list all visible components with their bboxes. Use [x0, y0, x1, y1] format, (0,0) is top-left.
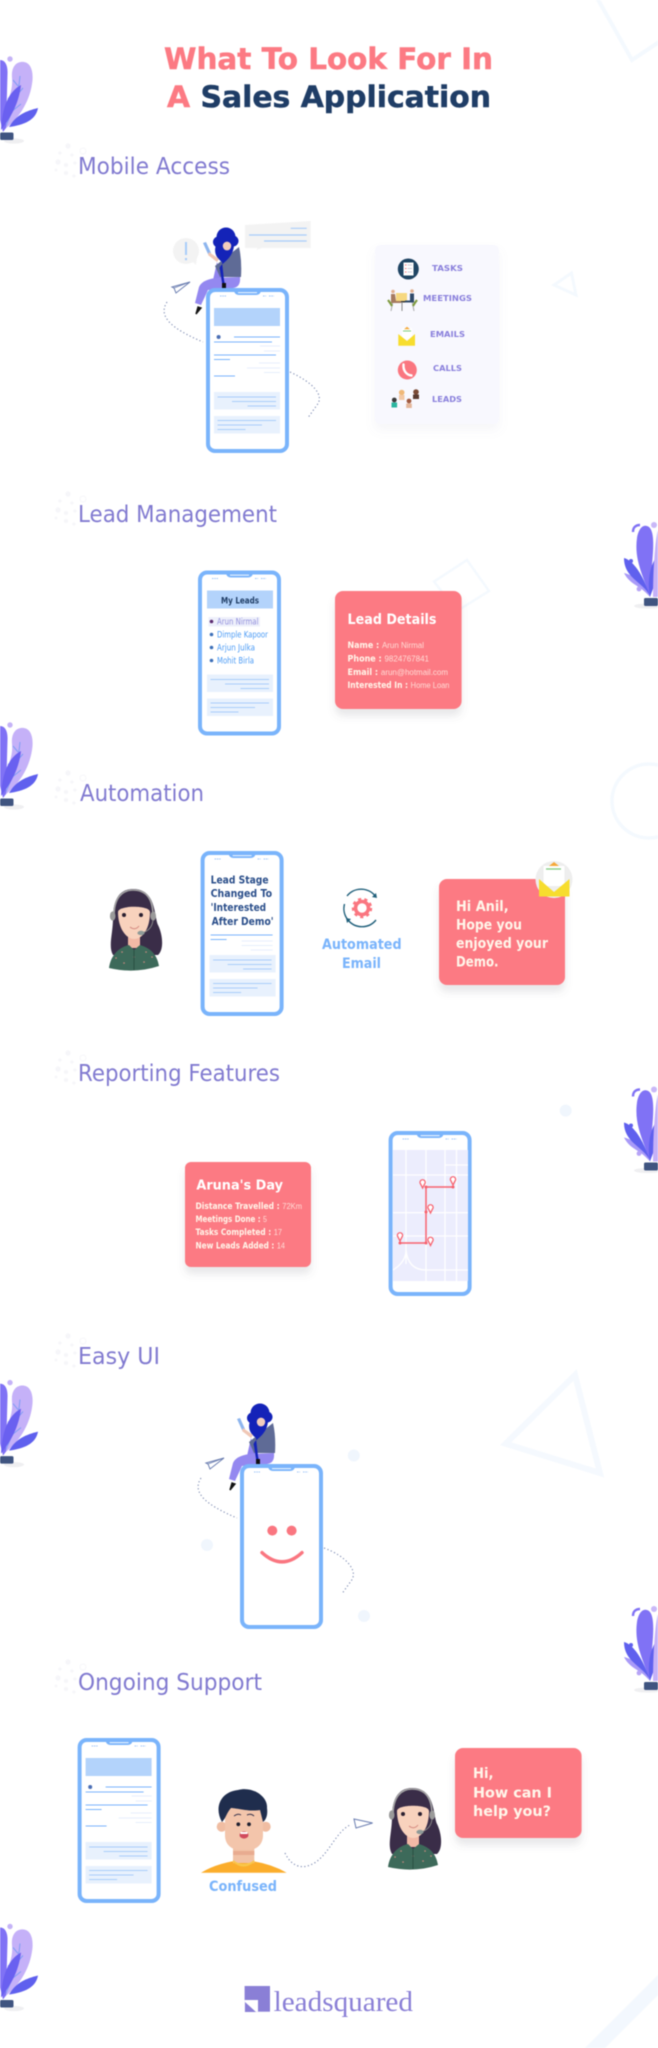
list of leads: Dimple Kapoor [217, 630, 268, 640]
card details: Name : Arun Nirmal [348, 640, 424, 651]
woman [164, 228, 241, 342]
heading: My Leads: My Leads [221, 596, 259, 606]
card: support message [455, 1748, 582, 1838]
day statistics [196, 1201, 302, 1250]
heading: Automation [55, 770, 204, 807]
card heading: Aruna's Day [196, 1178, 283, 1194]
phone: lead stage [203, 853, 282, 1014]
illustration: woman on smiley phone [198, 1404, 353, 1627]
heading: Ongoing Support: Ongoing Support [78, 1670, 262, 1696]
label: confused: Confused [209, 1879, 277, 1895]
route [400, 1187, 453, 1243]
day statistics: Tasks Completed : 17 [196, 1227, 282, 1237]
phone message: Changed To [211, 887, 272, 900]
icon: tasks [398, 258, 419, 280]
heading: Lead Management: Lead Management [78, 502, 277, 528]
title [164, 42, 493, 114]
label: calls: CALLS [433, 364, 462, 373]
agent avatar [388, 1788, 441, 1870]
phone message: 'Interested [211, 901, 266, 914]
phone message: After Demo' [212, 915, 274, 928]
icon: leads [392, 389, 419, 408]
label: emails: EMAILS [430, 330, 465, 339]
list of leads [217, 618, 268, 666]
list of leads: Arun Nirmal [217, 618, 258, 628]
heading: Easy UI [55, 1333, 160, 1370]
card: automated message: Hi Anil, [456, 899, 509, 915]
phone message [211, 874, 274, 928]
plant: top left [0, 56, 38, 144]
plant: left, easy UI section [0, 1380, 38, 1467]
heading: Lead Management [55, 491, 277, 528]
agent avatar [109, 889, 162, 971]
icon: meetings [388, 289, 417, 311]
background shapes [201, 0, 658, 2048]
card heading: Lead Details [348, 612, 436, 628]
smiley face [262, 1526, 302, 1562]
label: automated email: Automated [322, 937, 402, 953]
plant: right, lead section [624, 522, 658, 609]
heading: Mobile Access: Mobile Access [78, 154, 230, 180]
label: automated email: Email [342, 956, 381, 972]
heading: Ongoing Support [55, 1659, 262, 1696]
label: automated email [322, 937, 402, 972]
dotted trail [290, 372, 319, 417]
card: Aruna's day [185, 1162, 311, 1267]
heading: Automation: Automation [80, 781, 204, 807]
plant: left, automation section [0, 722, 38, 810]
confused man [201, 1789, 287, 1873]
phone: support app [80, 1740, 159, 1901]
map pins [397, 1177, 456, 1246]
card details: Email : arun@hotmail.com [348, 667, 448, 678]
card: support message: How can I [473, 1786, 552, 1802]
icon: envelope [536, 861, 572, 898]
heading: Reporting Features: Reporting Features [78, 1061, 280, 1087]
day statistics: Distance Travelled : 72Km [196, 1201, 302, 1211]
phone: my leads [200, 572, 279, 734]
plant: right, support section [624, 1606, 658, 1693]
icon: emails [398, 327, 415, 346]
card details: Interested In : Home Loan [348, 680, 450, 691]
card details: Phone : 9824767841 [348, 654, 429, 664]
heading: Mobile Access [55, 143, 230, 180]
label: leads: LEADS [432, 395, 462, 404]
heading: Easy UI: Easy UI [78, 1344, 160, 1370]
label: tasks: TASKS [432, 264, 463, 273]
card: automated message: enjoyed your [456, 936, 549, 952]
card: lead details [335, 591, 462, 709]
card details [348, 640, 450, 691]
speech bubble [245, 221, 311, 250]
icon: automation gear [344, 889, 377, 927]
card: support message: Hi, [473, 1766, 494, 1782]
list of leads: Arjun Julka [217, 644, 255, 654]
panel: feature list [375, 245, 499, 424]
illustration: woman sitting on phone with chat bubbles [164, 221, 319, 451]
day statistics: Meetings Done : 5 [196, 1214, 267, 1224]
day statistics: New Leads Added : 14 [196, 1240, 285, 1250]
card: support message: help you? [473, 1804, 551, 1820]
phone message: Lead Stage [211, 874, 269, 886]
list of leads: Mohit Birla [217, 656, 254, 666]
alert bubble [173, 238, 199, 265]
label: meetings: MEETINGS [423, 294, 472, 303]
card: automated message: Hope you [456, 918, 522, 934]
dotted arrow with paper plane [285, 1819, 373, 1867]
title: A Sales Application [167, 80, 491, 114]
card: automated message [439, 861, 572, 985]
plant: bottom left [0, 1924, 38, 2011]
heading: Reporting Features [55, 1050, 280, 1087]
plant: right, reporting section [624, 1086, 658, 1173]
phone: map with route [391, 1133, 470, 1294]
title: What To Look For In [164, 42, 493, 76]
card: automated message: Demo. [456, 954, 498, 970]
logo: leadsquared: leadsquared [274, 1986, 413, 2018]
icon: calls [398, 360, 417, 380]
phone [208, 290, 287, 451]
